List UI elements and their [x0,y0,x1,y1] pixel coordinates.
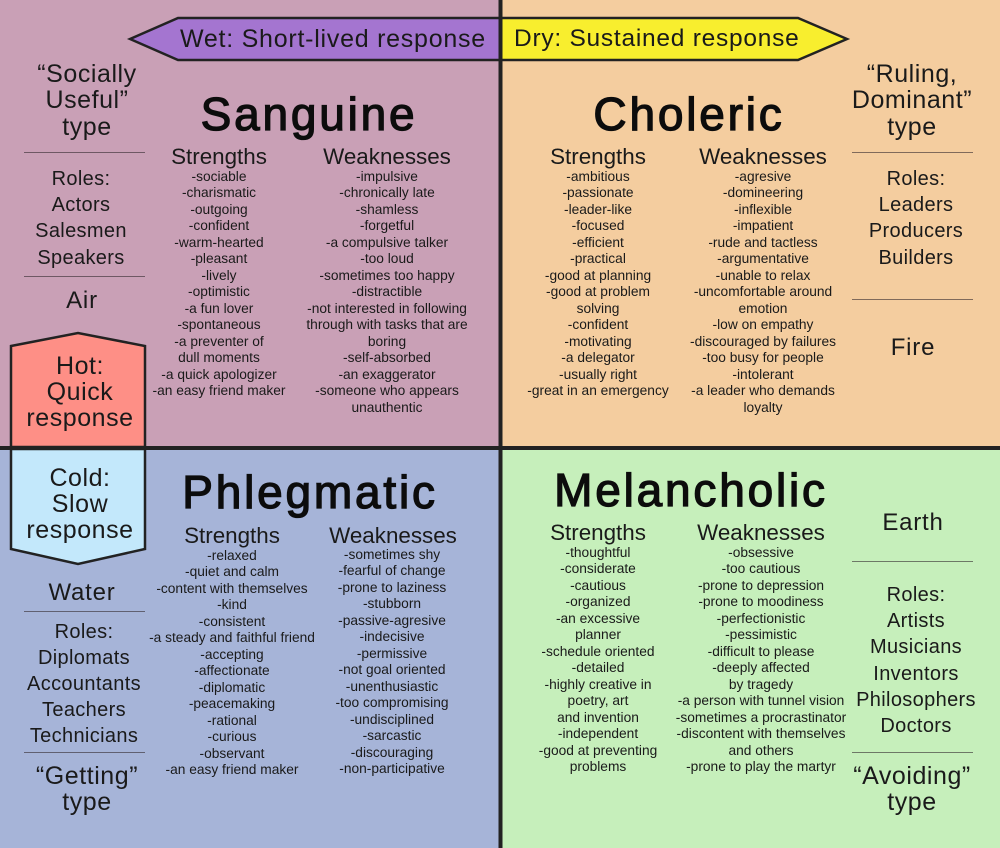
melancholic weaknesses list: -pessimistic [725,627,797,642]
phlegmatic weaknesses list: -prone to laziness [338,580,446,594]
choleric weaknesses list: -rude and tactless [708,234,818,250]
melancholic weaknesses list: -difficult to please [708,644,814,658]
phlegmatic roles: Roles: [55,620,113,642]
panel: choleric background [500,0,1000,448]
phlegmatic strengths list: -content with themselves [156,580,308,596]
sanguine weaknesses list: -impulsive [356,168,418,184]
melancholic weaknesses list: and others [728,742,793,758]
melancholic strengths list: -an excessive [556,610,640,626]
choleric strengths list: -leader-like [564,202,632,216]
label: cold [26,464,134,544]
panel: sanguine background [0,0,500,448]
choleric strengths list: -a delegator [561,350,635,365]
sanguine weaknesses list: -too loud [360,251,414,266]
sanguine weaknesses list: -distractible [352,284,422,299]
melancholic weaknesses list: by tragedy [729,676,793,692]
phlegmatic weaknesses list: -undisciplined [350,712,434,726]
sanguine weaknesses list: -sometimes too happy [319,268,455,282]
phlegmatic weaknesses list: -indecisive [360,629,424,644]
arrow label: dry: Dry: Sustained response [514,25,800,52]
phlegmatic weaknesses list: -non-participative [339,761,445,776]
phlegmatic weaknesses list: -fearful of change [338,563,446,578]
choleric element: Fire [891,334,935,361]
choleric weaknesses list: loyalty [744,400,782,414]
melancholic roles: Inventors [873,663,959,685]
sanguine weaknesses list: -someone who appears [315,383,459,398]
sanguine weaknesses list: unauthentic [351,400,423,414]
phlegmatic strengths list: -observant [200,746,264,760]
phlegmatic strengths list: -rational [207,712,257,728]
phlegmatic weaknesses list: -passive-agresive [338,612,446,628]
melancholic title: Melancholic [554,464,828,516]
choleric strengths list: -good at problem [546,284,650,299]
melancholic weaknesses heading: Weaknesses [697,520,825,545]
label: cold: response [26,516,134,544]
sanguine weaknesses list: -not interested in following [307,300,467,316]
choleric weaknesses list: -impatient [733,218,793,233]
phlegmatic strengths list [149,548,315,777]
choleric roles: Roles: [887,168,945,190]
sanguine strengths list: -confident [189,218,249,233]
sanguine roles: Salesmen [35,220,127,242]
phlegmatic strengths list: -an easy friend maker [166,762,298,777]
sanguine strengths list: dull moments [178,350,260,365]
melancholic strengths list: -independent [558,726,638,741]
choleric type: Dominant” [852,86,972,114]
choleric weaknesses list: -uncomfortable around [694,284,832,299]
melancholic strengths list: -cautious [570,578,626,592]
choleric strengths heading: Strengths [550,144,646,169]
phlegmatic type: “Getting” [36,762,138,790]
sanguine strengths list: -a fun lover [185,300,253,316]
panel: phlegmatic background [0,448,500,848]
choleric roles [869,168,963,269]
melancholic weaknesses list: -too cautious [722,561,800,576]
phlegmatic element: Water [48,578,116,606]
phlegmatic type: type [62,788,112,816]
choleric strengths list: -motivating [564,334,632,348]
melancholic strengths list: planner [575,627,621,642]
sanguine strengths list: -an easy friend maker [152,383,285,398]
phlegmatic type [36,762,138,816]
melancholic type [853,762,971,816]
sanguine roles: Actors [52,194,110,216]
melancholic roles [856,584,976,737]
divider [24,611,145,612]
phlegmatic strengths heading: Strengths [184,523,280,548]
choleric weaknesses list: -domineering [723,185,803,200]
melancholic weaknesses list: -perfectionistic [717,610,805,626]
choleric strengths list: -usually right [559,366,637,382]
melancholic strengths list: -highly creative in [544,676,652,692]
melancholic weaknesses list: -deeply affected [712,660,810,675]
sanguine type: Useful” [45,86,129,114]
melancholic roles: Doctors [880,715,952,737]
label: hot [26,352,134,432]
melancholic weaknesses list: -a person with tunnel vision [678,693,844,708]
phlegmatic strengths list: -relaxed [207,548,257,562]
melancholic weaknesses list: -obsessive [728,544,794,560]
choleric weaknesses list [690,168,836,415]
sanguine weaknesses list [306,168,468,414]
melancholic strengths heading: Strengths [550,520,646,545]
melancholic element: Earth [882,509,944,536]
choleric weaknesses list: -intolerant [732,366,794,382]
melancholic weaknesses list: -prone to play the martyr [686,759,836,774]
phlegmatic roles: Accountants [27,673,141,695]
melancholic strengths list: and invention [557,710,639,724]
divider [24,276,145,277]
choleric type: “Ruling, [867,60,957,88]
phlegmatic weaknesses list: -unenthusiastic [346,678,438,694]
melancholic type: type [887,788,937,816]
phlegmatic weaknesses list: -stubborn [363,596,421,611]
sanguine strengths heading: Strengths [171,144,267,169]
melancholic strengths list: -considerate [560,561,636,576]
phlegmatic weaknesses list: -sometimes shy [344,546,440,562]
melancholic roles: Artists [887,610,945,632]
sanguine strengths list: -charismatic [182,185,256,200]
melancholic weaknesses list: -sometimes a procrastinator [676,710,846,724]
phlegmatic strengths list: -affectionate [194,663,270,678]
label: hot: Hot: [56,352,104,380]
choleric title: Choleric [593,88,785,140]
sanguine weaknesses list: boring [368,334,406,348]
divider [852,752,973,753]
melancholic strengths list: -thoughtful [566,544,630,560]
melancholic weaknesses list [676,544,846,774]
phlegmatic weaknesses list [335,546,449,776]
choleric weaknesses list: emotion [739,300,787,316]
melancholic weaknesses list: -prone to depression [698,578,824,592]
choleric strengths list: -efficient [572,234,624,250]
choleric roles: Builders [878,247,954,269]
phlegmatic weaknesses heading: Weaknesses [329,523,457,548]
choleric weaknesses list: -low on empathy [713,317,813,332]
melancholic weaknesses list: -discontent with themselves [677,726,845,741]
divider [852,561,973,562]
sanguine weaknesses list: -shamless [356,202,418,216]
phlegmatic roles: Teachers [42,699,126,721]
sanguine strengths list: -a preventer of [174,334,264,348]
melancholic strengths list: -schedule oriented [541,644,655,658]
divider [852,299,973,300]
phlegmatic roles [27,620,141,747]
phlegmatic weaknesses list: -discouraging [351,744,433,760]
choleric weaknesses list: -a leader who demands [691,383,835,398]
melancholic weaknesses list: -prone to moodiness [698,594,824,609]
phlegmatic title: Phlegmatic [182,466,438,518]
choleric type: type [887,113,937,141]
sanguine roles [35,168,127,269]
sanguine type [37,60,137,141]
sanguine strengths list: -outgoing [190,202,248,216]
sanguine type: type [62,113,112,141]
melancholic strengths list: -detailed [572,660,624,675]
sanguine strengths list: -a quick apologizer [161,366,277,382]
melancholic strengths list: problems [570,759,626,774]
phlegmatic roles: Technicians [30,725,138,747]
label: cold: Cold: [49,464,111,492]
sanguine strengths list [152,168,286,398]
phlegmatic strengths list: -accepting [200,646,264,662]
choleric weaknesses list: -argumentative [717,251,809,266]
choleric strengths list: -good at planning [545,268,651,282]
horizontal axis [0,446,1000,450]
phlegmatic strengths list: -curious [208,729,256,744]
phlegmatic weaknesses list: -sarcastic [363,728,421,743]
phlegmatic weaknesses list: -too compromising [335,695,449,710]
sanguine title: Sanguine [201,88,417,140]
sanguine strengths list: -sociable [191,168,247,184]
choleric weaknesses list: -discouraged by failures [690,334,836,348]
arrow label: wet: Wet: Short-lived response [180,25,486,53]
divider [24,152,145,153]
label: hot: response [26,404,134,432]
sanguine weaknesses list: -chronically late [339,185,435,200]
choleric roles: Producers [869,220,963,242]
phlegmatic roles: Diplomats [38,647,130,669]
sanguine weaknesses list: through with tasks that are [306,317,468,332]
choleric strengths list: solving [577,300,619,316]
choleric strengths list: -focused [572,218,624,233]
melancholic roles: Philosophers [856,689,976,711]
sanguine strengths list: -spontaneous [177,317,261,332]
sanguine strengths list: -pleasant [191,251,247,266]
phlegmatic weaknesses list: -not goal oriented [338,662,446,677]
choleric weaknesses list: -unable to relax [716,268,810,282]
sanguine element: Air [66,287,98,314]
melancholic roles: Musicians [870,636,962,658]
phlegmatic strengths list: -peacemaking [189,696,275,711]
sanguine strengths list: -lively [201,268,237,282]
choleric strengths list: -ambitious [566,168,630,184]
phlegmatic strengths list: -a steady and faithful friend [149,630,315,645]
sanguine strengths list: -optimistic [188,284,250,299]
melancholic strengths list: poetry, art [568,693,628,708]
sanguine roles: Speakers [37,247,125,269]
choleric type [852,60,972,141]
melancholic strengths list: -organized [566,594,630,609]
melancholic strengths list [539,544,657,774]
phlegmatic weaknesses list: -permissive [357,646,427,660]
sanguine weaknesses list: -an exaggerator [338,366,436,382]
divider [24,752,145,753]
choleric strengths list: -practical [570,251,626,266]
choleric roles: Leaders [879,194,953,216]
phlegmatic strengths list: -diplomatic [199,680,265,694]
choleric weaknesses list: -agresive [735,168,791,184]
phlegmatic strengths list: -consistent [199,614,265,628]
sanguine type: “Socially [37,60,137,88]
choleric strengths list: -great in an emergency [527,383,669,398]
panel: melancholic background [500,448,1000,848]
melancholic type: “Avoiding” [853,762,971,790]
melancholic strengths list: -good at preventing [539,742,657,758]
sanguine weaknesses list: -a compulsive talker [326,234,448,250]
sanguine strengths list: -warm-hearted [174,234,264,250]
choleric strengths list [527,168,669,398]
choleric weaknesses list: -too busy for people [702,350,824,365]
choleric strengths list: -passionate [562,185,634,200]
sanguine weaknesses heading: Weaknesses [323,144,451,169]
sanguine roles: Roles: [52,168,110,190]
divider [852,152,973,153]
sanguine weaknesses list: -self-absorbed [343,350,431,365]
choleric weaknesses list: -inflexible [734,202,792,216]
choleric weaknesses heading: Weaknesses [699,144,827,169]
phlegmatic strengths list: -quiet and calm [185,564,279,579]
label: cold: Slow [52,490,108,518]
label: hot: Quick [47,378,113,406]
sanguine weaknesses list: -forgetful [360,218,414,233]
phlegmatic strengths list: -kind [217,597,247,612]
choleric strengths list: -confident [568,317,628,332]
melancholic roles: Roles: [887,584,945,606]
